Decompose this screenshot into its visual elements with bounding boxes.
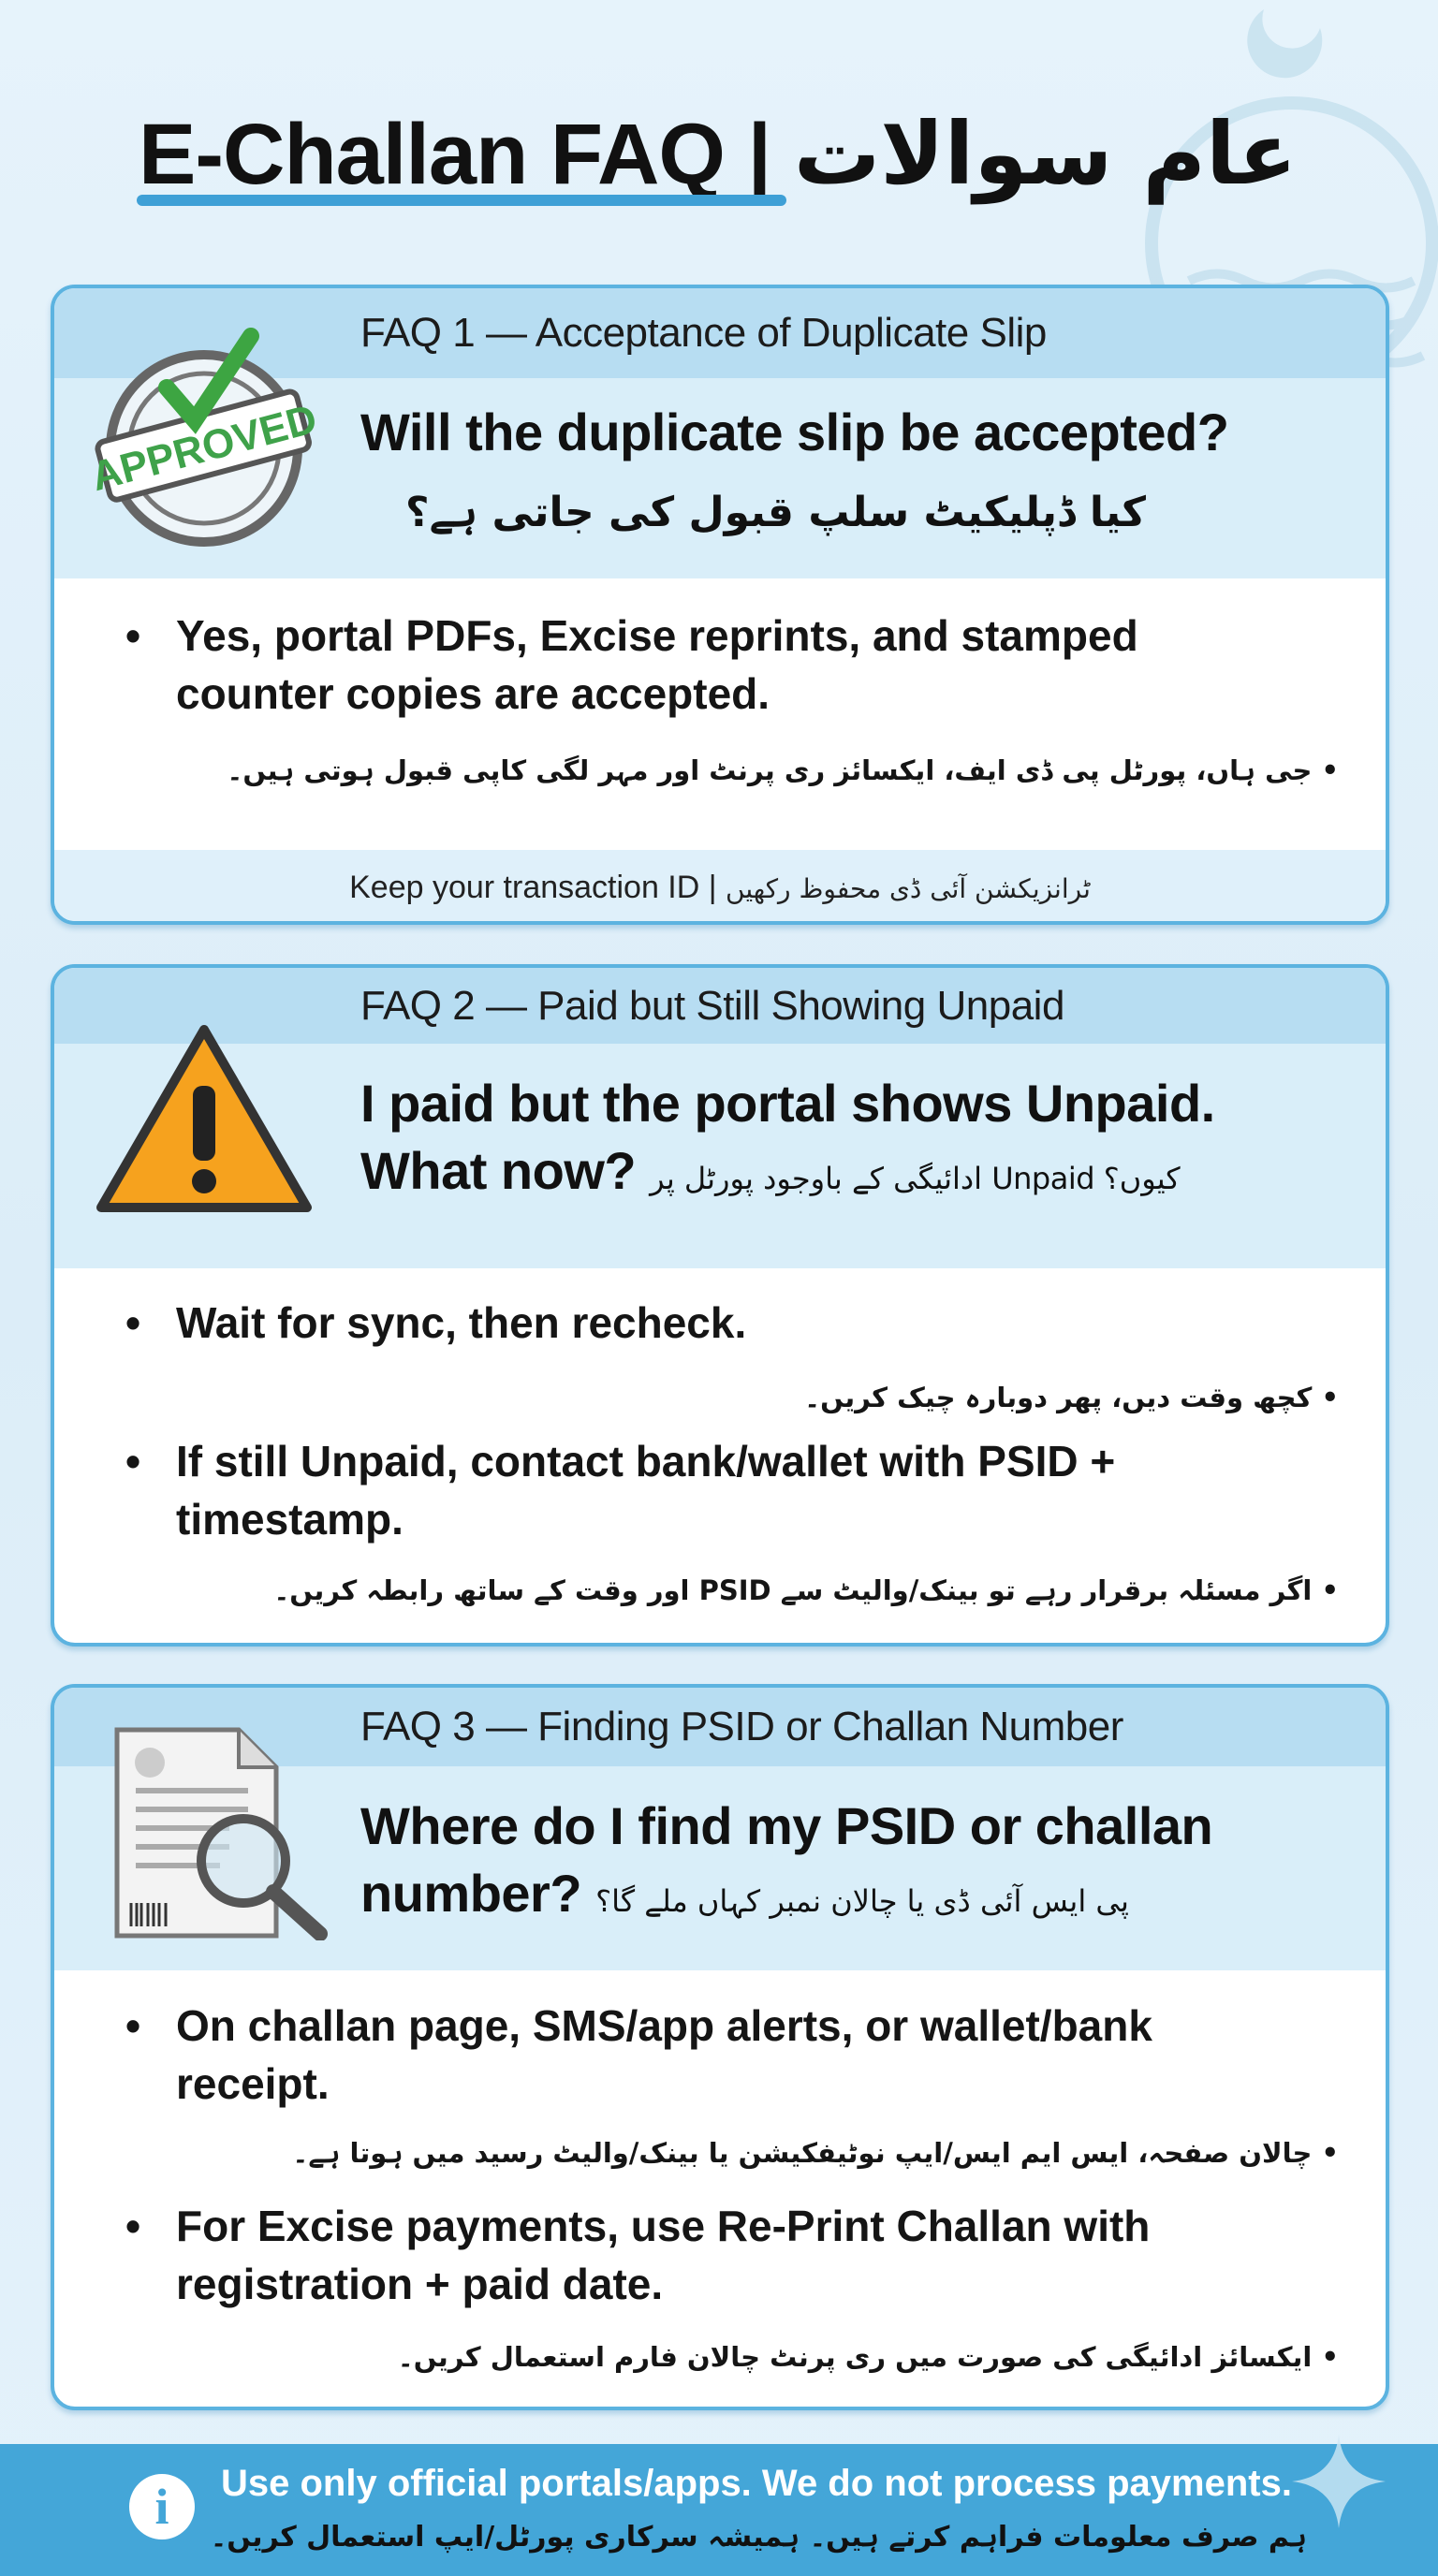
- question band 1: [54, 378, 1386, 578]
- header FAQ 2: FAQ 2 — Paid but Still Showing Unpaid: [360, 983, 1064, 1028]
- answer body 2: Wait for sync, then recheck.: [176, 1298, 746, 1347]
- panel: FAQ 3: registration + paid date.: [176, 2260, 663, 2308]
- footer text: Use only official portals/apps. We do not process payments.: [221, 2463, 1292, 2504]
- question band 2: What now? ادائیگی کے باوجود پورٹل پر Unpaid کیوں؟: [360, 1141, 1181, 1200]
- header FAQ 1: FAQ 1 — Acceptance of Duplicate Slip: [360, 310, 1047, 356]
- question band 3: [54, 1766, 1386, 1970]
- question band 3: number? پی ایس آئی ڈی یا چالان نمبر کہاں ملے گا؟: [360, 1864, 1129, 1923]
- question band 2: [54, 1044, 1386, 1268]
- answer body 3: [176, 1997, 1431, 2113]
- question band 2: I paid but the portal shows Unpaid.: [360, 1074, 1215, 1133]
- icon: warning triangle: [96, 1025, 312, 1212]
- header FAQ 3: FAQ 3 — Finding PSID or Challan Number: [360, 1704, 1123, 1749]
- question band 1: Will the duplicate slip be accepted?: [360, 402, 1228, 461]
- panel: FAQ 2: If still Unpaid, contact bank/wallet with PSID +: [176, 1437, 1115, 1486]
- header FAQ 1: [54, 288, 1386, 378]
- answer body 1: [176, 607, 1431, 723]
- panel: FAQ 3: • ایکسائز ادائیگی کی صورت میں ری پرنٹ چالان فارم استعمال کریں۔: [398, 2341, 1339, 2373]
- sparkle: [1292, 2437, 1386, 2527]
- panel: FAQ 1: • جی ہاں، پورٹل پی ڈی ایف، ایکسائز ری پرنٹ اور مہر لگی کاپی قبول ہوتی ہیں۔: [227, 754, 1339, 786]
- header FAQ 2: [54, 968, 1386, 1044]
- answer body 1: counter copies are accepted.: [176, 669, 770, 718]
- icon: info: i: [154, 2479, 169, 2535]
- footer note 1: [54, 850, 1386, 929]
- icon: approved stamp: [92, 328, 321, 547]
- footer bar: ہم صرف معلومات فراہم کرتے ہیں۔ ہمیشہ سرکاری پورٹل/ایپ استعمال کریں۔: [211, 2521, 1307, 2554]
- footer note 1: Keep your transaction ID | ٹرانزیکشن آئی ڈی محفوظ رکھیں: [349, 870, 1091, 905]
- panel: FAQ 3: • چالان صفحہ، ایس ایم ایس/ایپ نوٹیفکیشن یا بینک/والیٹ رسید میں ہوتا ہے۔: [292, 2137, 1339, 2169]
- icon: info: [129, 2474, 195, 2539]
- footer bar: [0, 2444, 1438, 2576]
- icon: approved stamp: APPROVED: [92, 396, 321, 500]
- answer body 3: receipt.: [176, 2059, 330, 2108]
- icon: document with magnifier: [114, 1728, 328, 1940]
- decorative emblem: [1145, 9, 1438, 367]
- panel: FAQ 2: • کچھ وقت دیں، پھر دوبارہ چیک کریں۔: [804, 1382, 1339, 1413]
- header FAQ 3: [54, 1688, 1386, 1766]
- title underline: [137, 195, 786, 206]
- panel: FAQ 2: timestamp.: [176, 1495, 404, 1544]
- panel: FAQ 2: [51, 964, 1389, 1647]
- title: E-Challan FAQ | عام سوالات: [139, 104, 1297, 204]
- question band 1: کیا ڈپلیکیٹ سلپ قبول کی جاتی ہے؟: [405, 489, 1146, 536]
- answer body 3: On challan page, SMS/app alerts, or wallet/bank: [176, 2001, 1152, 2050]
- panel: FAQ 1: [51, 285, 1389, 925]
- answer body 1: Yes, portal PDFs, Excise reprints, and stamped: [176, 611, 1138, 660]
- panel: FAQ 3: For Excise payments, use Re-Print Challan with: [176, 2202, 1150, 2250]
- panel: FAQ 3: [51, 1684, 1389, 2410]
- panel: FAQ 2: • اگر مسئلہ برقرار رہے تو بینک/والیٹ سے PSID اور وقت کے ساتھ رابطہ کریں۔: [273, 1574, 1339, 1606]
- question band 3: Where do I find my PSID or challan: [360, 1796, 1212, 1855]
